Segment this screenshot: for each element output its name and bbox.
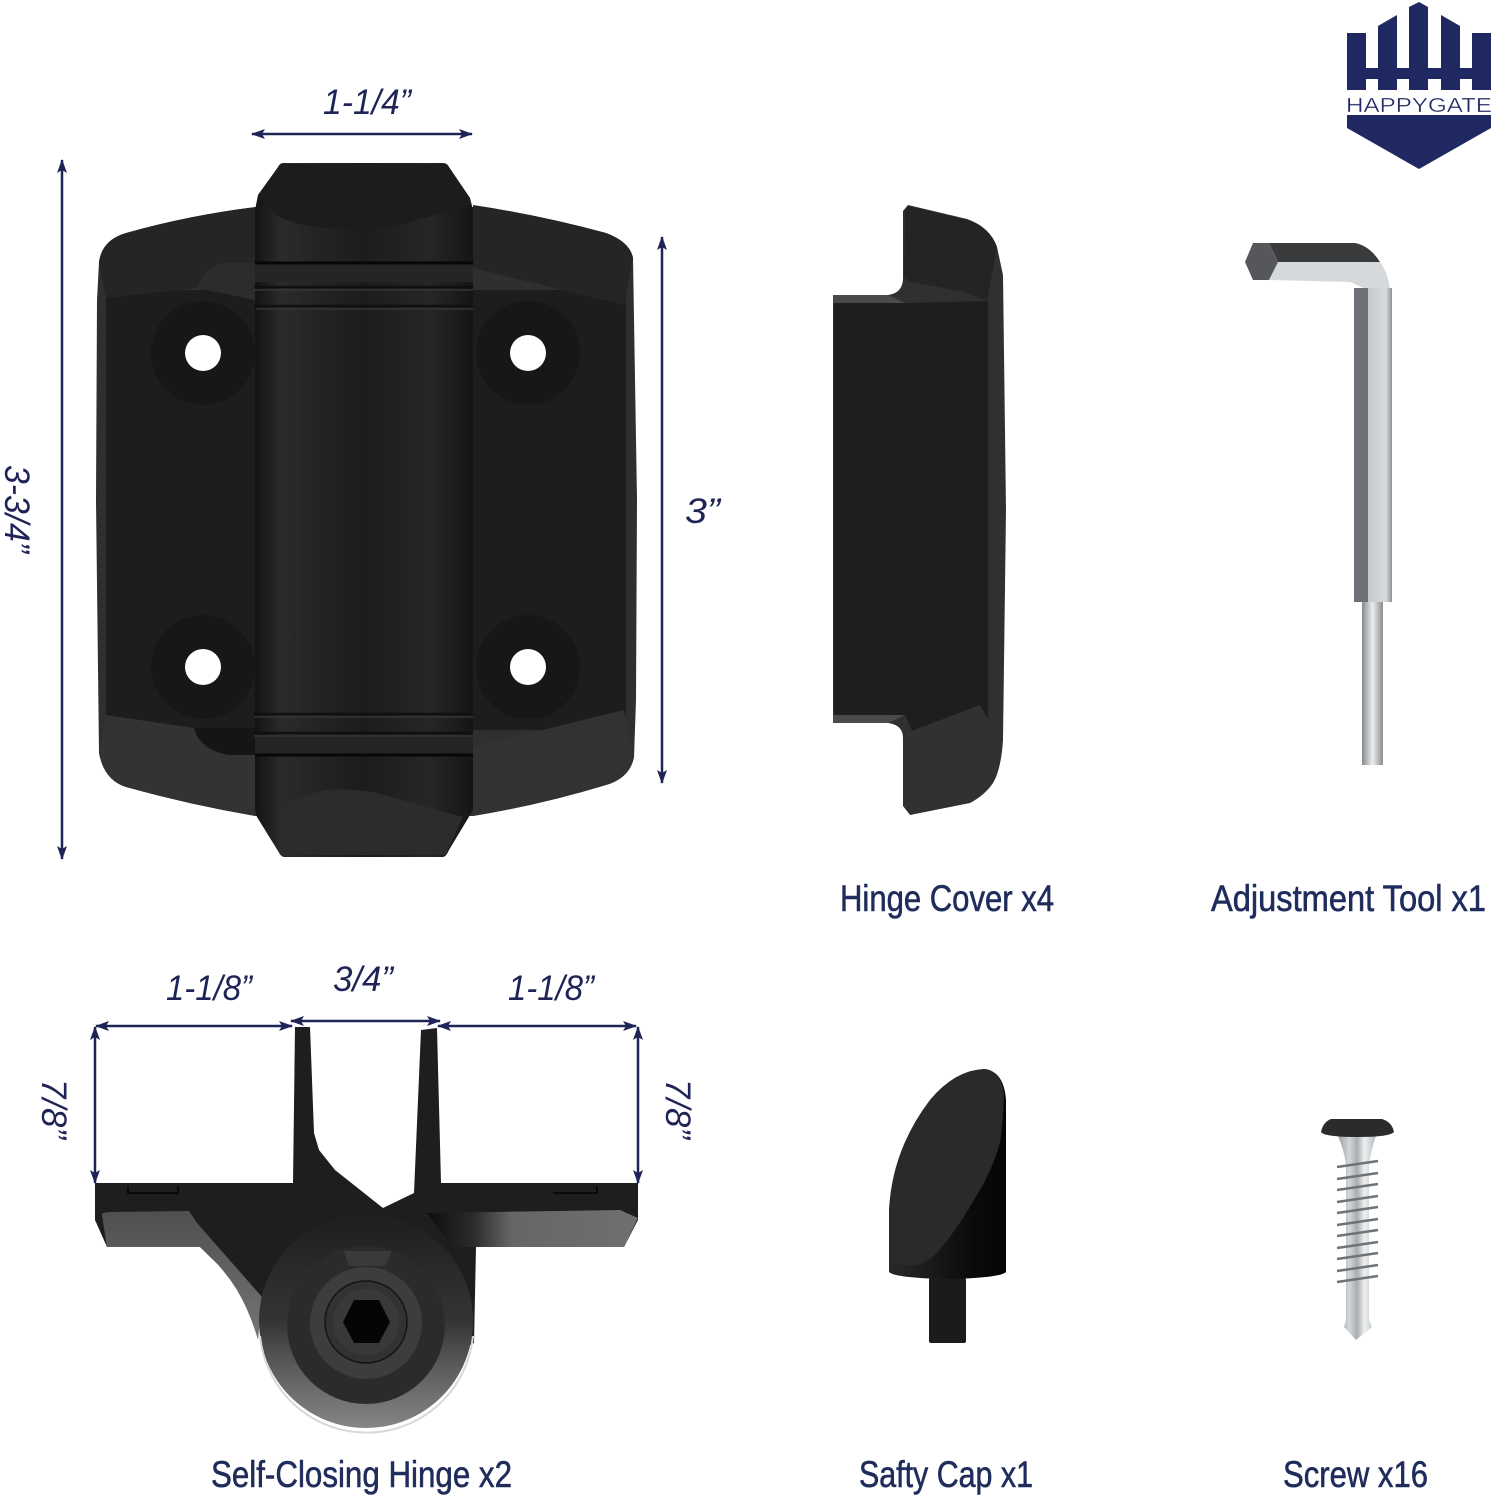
counterbore top right bbox=[476, 301, 580, 405]
screw threads bbox=[1337, 1161, 1378, 1282]
dimension right 1-1/8 inch: 1-1/8” bbox=[508, 969, 595, 1008]
hinge cover face bbox=[834, 301, 988, 731]
plate bottom bevel right bbox=[473, 710, 634, 816]
plate bottom bevel left bbox=[99, 715, 256, 815]
screw shank bbox=[1338, 1136, 1376, 1340]
screw head bbox=[1321, 1119, 1394, 1137]
label: screw: Screw x16 bbox=[1283, 1454, 1428, 1495]
knuckle inner ring bbox=[287, 1246, 445, 1404]
dimension 3/4 inch: 3/4” bbox=[333, 960, 394, 999]
right flange shaded front bbox=[427, 1210, 638, 1247]
hinge cover bottom panel bbox=[904, 705, 997, 814]
label: safety cap: Safty Cap x1 bbox=[859, 1454, 1033, 1495]
knuckle mid ring bbox=[310, 1267, 422, 1379]
hinge body bbox=[95, 1027, 638, 1400]
hinge barrel bbox=[255, 163, 473, 857]
left flange shaded front bbox=[102, 1211, 262, 1340]
tool long arm light side bbox=[1368, 288, 1392, 602]
mounting hole bottom left bbox=[185, 649, 221, 685]
cap stem bbox=[929, 1278, 966, 1343]
cap body bbox=[889, 1069, 1006, 1279]
hinge plate bbox=[96, 207, 637, 816]
cap slanted face bbox=[890, 1069, 1004, 1266]
tool bend bbox=[1269, 262, 1392, 602]
hinge knuckle rim bbox=[259, 1214, 473, 1428]
safety cap bbox=[889, 1069, 1006, 1343]
dimension 3 inch: 3” bbox=[685, 492, 722, 531]
hook detail bottom bbox=[194, 728, 256, 755]
barrel lower band bbox=[255, 735, 473, 755]
logo: HappyGate bbox=[1346, 2, 1492, 169]
dimension left 7/8 inch: 7/8” bbox=[34, 1079, 73, 1140]
hinge cover bbox=[833, 205, 1006, 815]
screw bbox=[1321, 1119, 1394, 1340]
counterbore bottom right bbox=[476, 615, 580, 719]
plate top bevel right bbox=[473, 205, 633, 305]
barrel top cap bbox=[258, 164, 470, 229]
tool long arm dark side bbox=[1354, 288, 1368, 602]
hook detail top bbox=[197, 263, 255, 300]
tension notch bbox=[344, 1251, 392, 1266]
counterbore top left bbox=[151, 301, 255, 405]
hinge cover light edge bbox=[833, 295, 905, 723]
dimension left 1-1/8 inch: 1-1/8” bbox=[166, 969, 253, 1008]
main hinge front view bbox=[96, 163, 637, 857]
barrel upper band bbox=[255, 264, 473, 282]
dimension right 7/8 inch: 7/8” bbox=[658, 1079, 697, 1140]
barrel bottom cap bbox=[280, 789, 463, 855]
logo wordmark: HAPPYGATE bbox=[1346, 95, 1492, 117]
flange recess marks bbox=[128, 1186, 597, 1193]
tool pin bbox=[1362, 602, 1383, 765]
hex socket bbox=[343, 1300, 390, 1343]
plate face bbox=[106, 290, 626, 730]
label: hinge cover: Hinge Cover x4 bbox=[840, 878, 1054, 919]
hinge side view bbox=[95, 1027, 638, 1433]
label: self-closing hinge: Self-Closing Hinge x2 bbox=[211, 1454, 512, 1495]
hinge cover top panel bbox=[904, 206, 997, 301]
plate top bevel left bbox=[99, 207, 256, 300]
knuckle hub bbox=[325, 1281, 407, 1363]
mounting hole bottom right bbox=[510, 649, 546, 685]
mounting hole top right bbox=[510, 335, 546, 371]
tool hex tip bbox=[1245, 243, 1278, 280]
dimension 1-1/4 inch: 1-1/4” bbox=[323, 83, 412, 122]
counterbore bottom left bbox=[151, 615, 255, 719]
adjustment tool bbox=[1245, 243, 1392, 765]
mounting hole top left bbox=[185, 335, 221, 371]
